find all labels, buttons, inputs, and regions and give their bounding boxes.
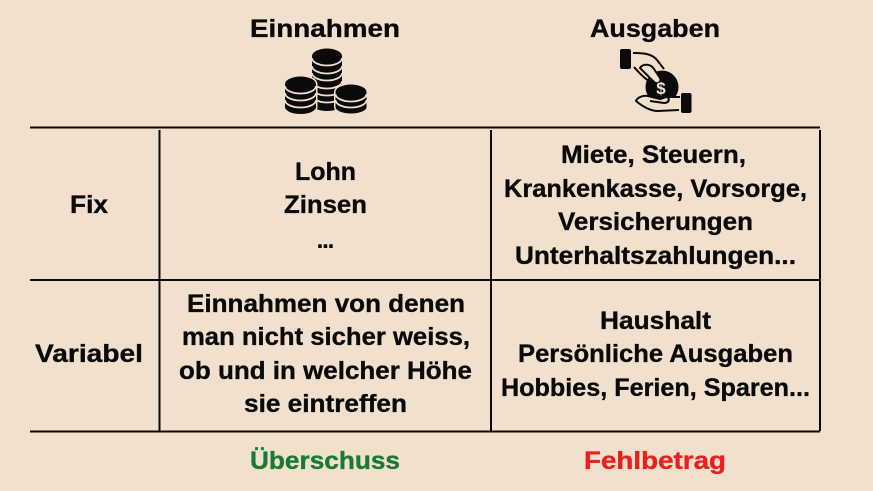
- cell: fixed expenses: Versicherungen: [558, 208, 753, 236]
- cell: fixed expenses: Miete, Steuern,: [561, 141, 746, 169]
- icon: hands exchanging coin: [620, 49, 692, 113]
- row label: Variabel: Variabel: [35, 340, 143, 368]
- cell: variable expenses: Persönliche Ausgaben: [518, 340, 793, 368]
- icon: hands exchanging coin: $: [656, 79, 666, 98]
- cell: fixed income: [284, 158, 367, 254]
- cell: variable income: Einnahmen von denen: [187, 290, 465, 318]
- icon: coin stacks: [285, 48, 366, 114]
- cell: variable income: ob und in welcher Höhe: [179, 357, 472, 385]
- cell: variable income: [179, 290, 472, 418]
- row label: Fix: Fix: [70, 191, 108, 219]
- label: Überschuss: Überschuss: [250, 446, 400, 475]
- cell: fixed expenses: [504, 141, 807, 270]
- heading: Ausgaben: Ausgaben: [590, 15, 720, 43]
- label: Fehlbetrag: Fehlbetrag: [584, 447, 726, 475]
- cell: fixed income: Zinsen: [284, 191, 367, 219]
- cell: variable expenses: Hobbies, Ferien, Sparen...: [501, 374, 810, 402]
- cell: variable expenses: Haushalt: [600, 307, 712, 335]
- cell: fixed expenses: Krankenkasse, Vorsorge,: [504, 175, 807, 203]
- cell: fixed income: Lohn: [295, 158, 356, 186]
- table grid: [30, 128, 820, 432]
- cell: variable income: man nicht sicher weiss,: [182, 323, 470, 351]
- heading: Einnahmen: Einnahmen: [250, 15, 400, 43]
- cell: variable expenses: [501, 307, 810, 402]
- cell: variable income: sie eintreffen: [244, 390, 407, 418]
- cell: fixed income: ...: [316, 226, 334, 254]
- cell: fixed expenses: Unterhaltszahlungen...: [515, 242, 796, 270]
